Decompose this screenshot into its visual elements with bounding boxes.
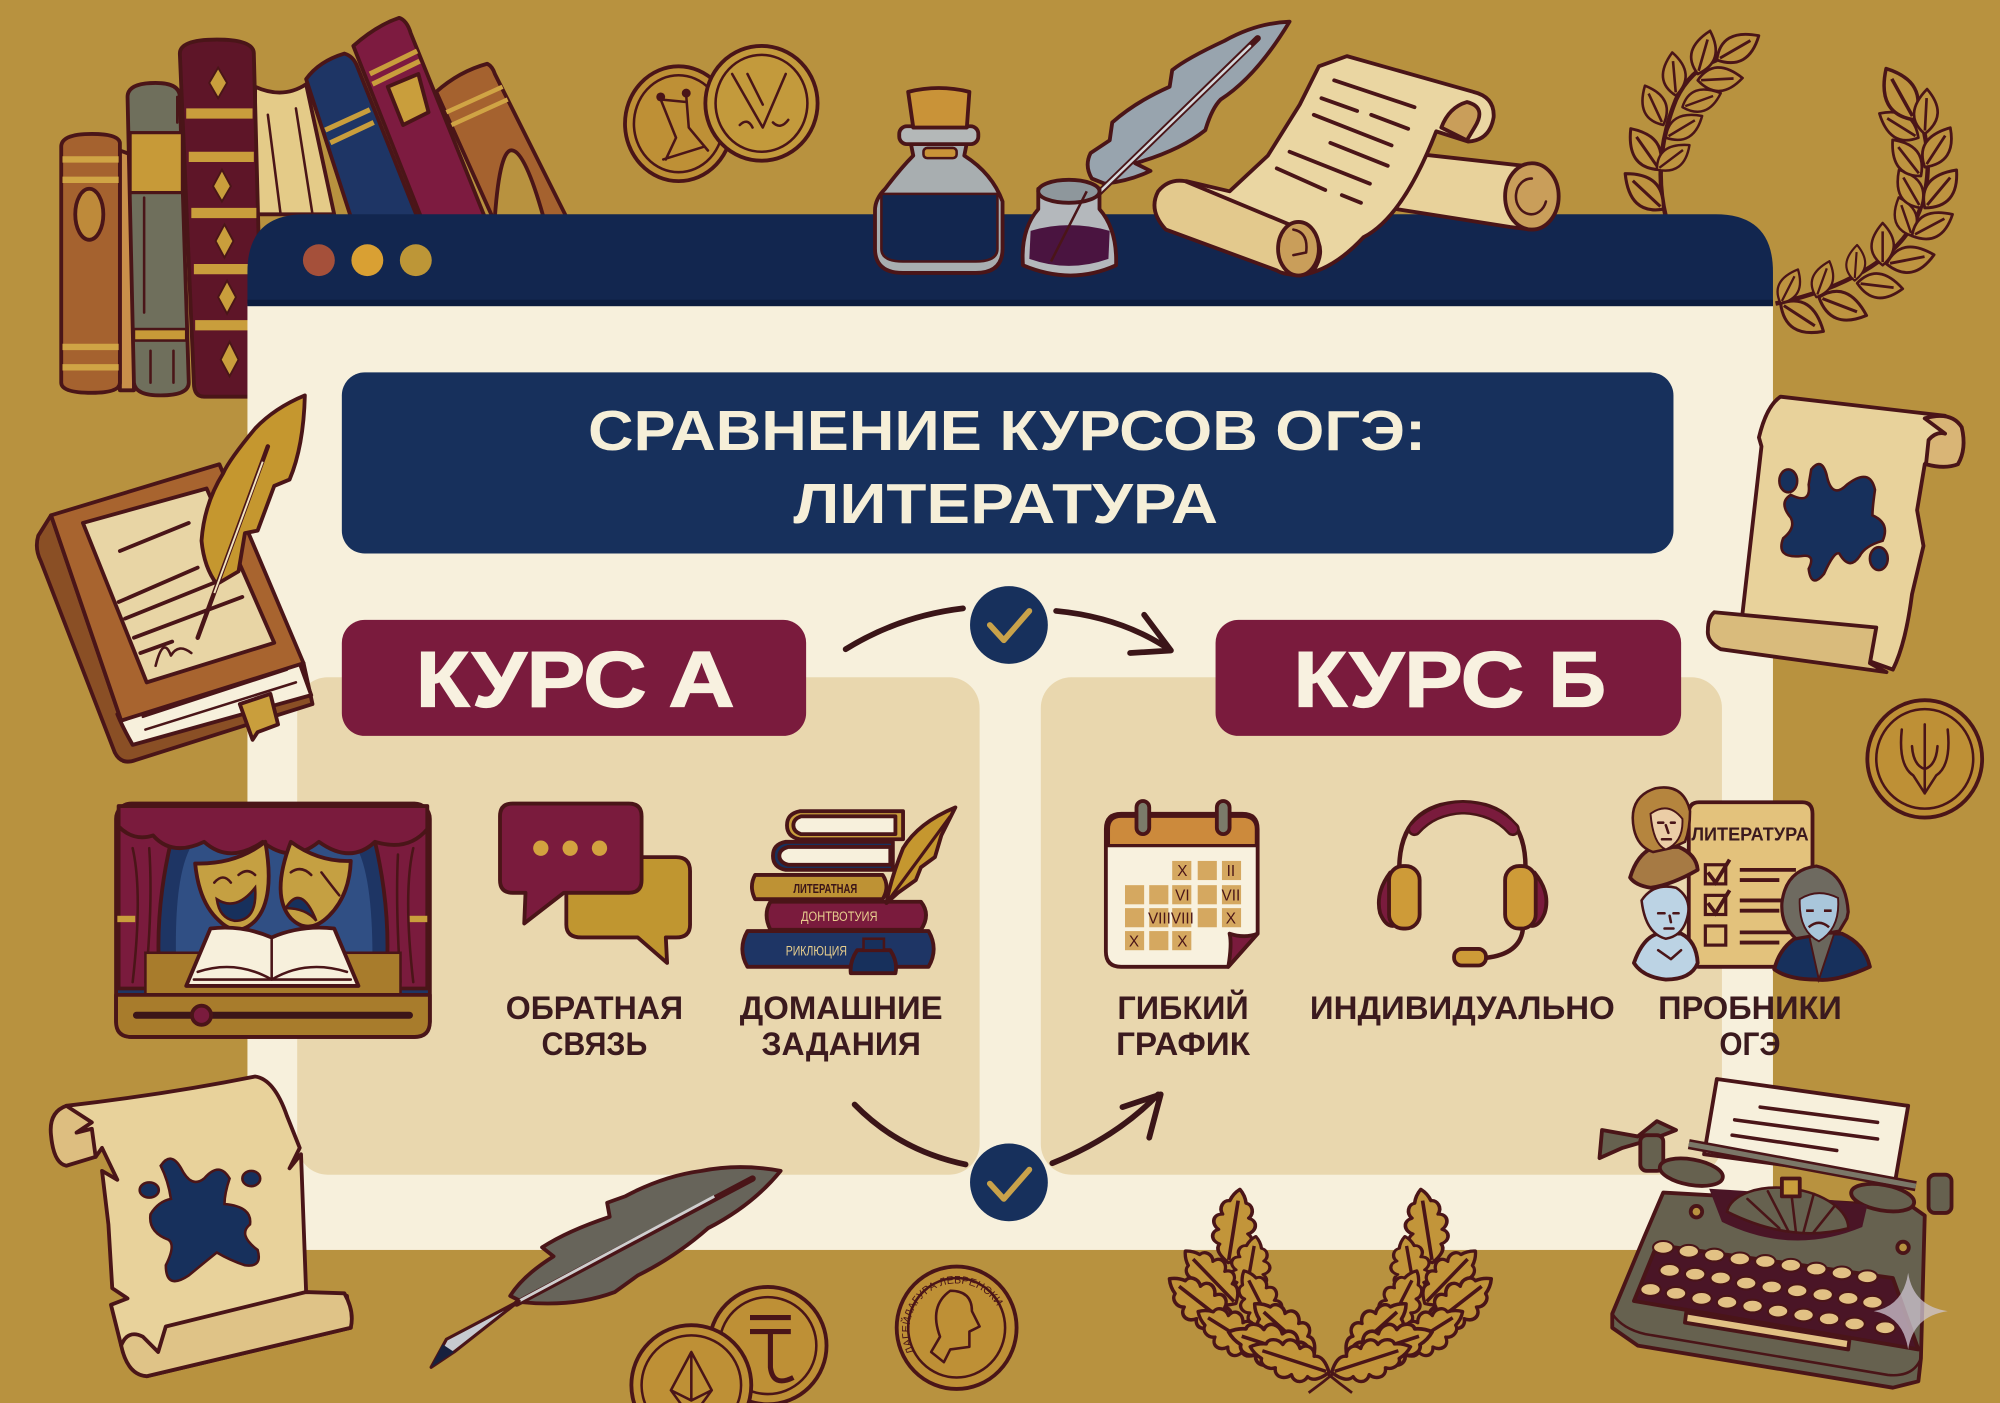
icon: laurel branch left [1616, 25, 1765, 219]
stage floor [145, 953, 401, 995]
exam sheet [1689, 802, 1812, 967]
video controls [116, 995, 430, 1037]
icon: open book with quill [37, 395, 313, 762]
icon: sparkle watermark [1874, 1273, 1948, 1349]
coin: profile: ЛАГЕЙЛАГУРА ЛЕБРЕНСКИ [900, 1276, 1003, 1353]
coin: ether [631, 1325, 751, 1403]
icon: calendar: II [1227, 863, 1235, 880]
label: individual: ИНДИВИДУАЛЬНО [1310, 990, 1615, 1026]
icon: oak wreath [1157, 1186, 1504, 1393]
icon: homework book stack: ДОНТВОТУИЯ [801, 909, 878, 924]
tragedy mask [281, 842, 351, 927]
icon: stack of books [61, 18, 566, 397]
exam sheet: ЛИТЕРАТУРА [1691, 824, 1809, 845]
portrait: curly poet [1630, 787, 1698, 888]
icon: dark feather bottom [431, 1167, 781, 1367]
icon: homework book stack [742, 807, 955, 973]
icon: parchment with ink blot right [1708, 397, 1964, 672]
open book [186, 928, 358, 986]
icon: bottom checkmark badge [970, 1143, 1048, 1221]
icon: grey feather in inkwell [1023, 22, 1290, 275]
panel: course A area [297, 677, 980, 1175]
typewriter body [1612, 1193, 1925, 1388]
window body [247, 304, 1773, 1250]
ink blot [150, 1159, 259, 1281]
heading: course B [1216, 620, 1681, 736]
label: flexible schedule: ГРАФИК [1116, 1026, 1250, 1062]
arrow: bottom right to course B [1052, 1094, 1161, 1163]
icon: ink bottle [875, 88, 1003, 273]
carriage lever [1599, 1121, 1676, 1158]
arrow: bottom left curve [855, 1105, 966, 1164]
label: mock exams: ОГЭ [1719, 1026, 1781, 1062]
icon: theatre video player [116, 804, 430, 1037]
icon: laurel branch right [1772, 61, 1967, 343]
icon: calendar: X [1177, 863, 1187, 880]
portrait: dark-haired writer [1774, 866, 1870, 980]
arrow: top left curve [846, 608, 963, 649]
heading: course A: А [668, 635, 735, 724]
icon: calendar: X [1129, 933, 1139, 950]
label: feedback: ОБРАТНАЯ [506, 990, 683, 1026]
label: mock exams [1658, 990, 1842, 1062]
icon: trident coin [1867, 700, 1982, 818]
icon: calendar: VII [1222, 887, 1240, 904]
icon: homework book stack: РИКЛЮЦИЯ [786, 943, 847, 958]
heading: course A [342, 620, 806, 736]
icon: mock exam sheet with portraits [1630, 787, 1870, 980]
label: feedback [506, 990, 683, 1062]
ink blot [1781, 464, 1885, 581]
coin: tenge [709, 1287, 827, 1403]
title subject: ЛИТЕРАТУРА [793, 472, 1218, 535]
icon: homework book stack: ЛИТЕРАТНАЯ [793, 881, 857, 896]
panel: title banner [342, 372, 1673, 554]
label: homework: ЗАДАНИЯ [761, 1026, 921, 1062]
heading: course A: КУРС [416, 635, 647, 724]
icon: calendar [1106, 801, 1258, 967]
keyboard [1634, 1245, 1918, 1349]
icon: parchment scroll top [1154, 56, 1559, 275]
panel: browser window [247, 214, 1773, 1250]
icon: parchment with ink blot left [51, 1076, 352, 1376]
heading: course B: КУРС [1293, 635, 1524, 724]
arrow: top right to course B [1056, 611, 1171, 653]
heading: course B: Б [1548, 635, 1606, 724]
carriage [1689, 1144, 1916, 1186]
icon: top checkmark badge [970, 586, 1048, 664]
portrait: blue writer [1634, 887, 1698, 980]
label: feedback: СВЯЗЬ [541, 1026, 647, 1062]
coin: profile [894, 1264, 1018, 1391]
icon: typewriter [1599, 1079, 1952, 1388]
icon: calendar: X [1177, 933, 1187, 950]
icon: headset [1379, 802, 1546, 966]
window header bar [247, 214, 1773, 306]
title text: СРАВНЕНИЕ КУРСОВ ОГЭ: [588, 399, 1426, 462]
label: flexible schedule: ГИБКИЙ [1117, 988, 1249, 1026]
stage spotlight [176, 829, 372, 957]
window control dots [303, 244, 432, 276]
panel: course B area [1041, 677, 1722, 1175]
icon: calendar: VIII [1171, 910, 1194, 927]
icon: calendar: VI [1175, 887, 1190, 904]
icon: coins bottom [630, 1264, 1018, 1403]
icon: calendar: X [1226, 910, 1236, 927]
icon: calendar: VIII [1148, 910, 1171, 927]
typewriter paper [1704, 1079, 1908, 1180]
icon: two old coins [625, 46, 818, 181]
label: homework [740, 990, 943, 1062]
label: mock exams: ПРОБНИКИ [1658, 990, 1842, 1026]
label: flexible schedule [1116, 988, 1250, 1062]
comedy mask [195, 842, 269, 930]
icon: feedback speech bubbles [500, 804, 690, 963]
label: homework: ДОМАШНИЕ [740, 990, 943, 1026]
curtains [117, 806, 427, 988]
